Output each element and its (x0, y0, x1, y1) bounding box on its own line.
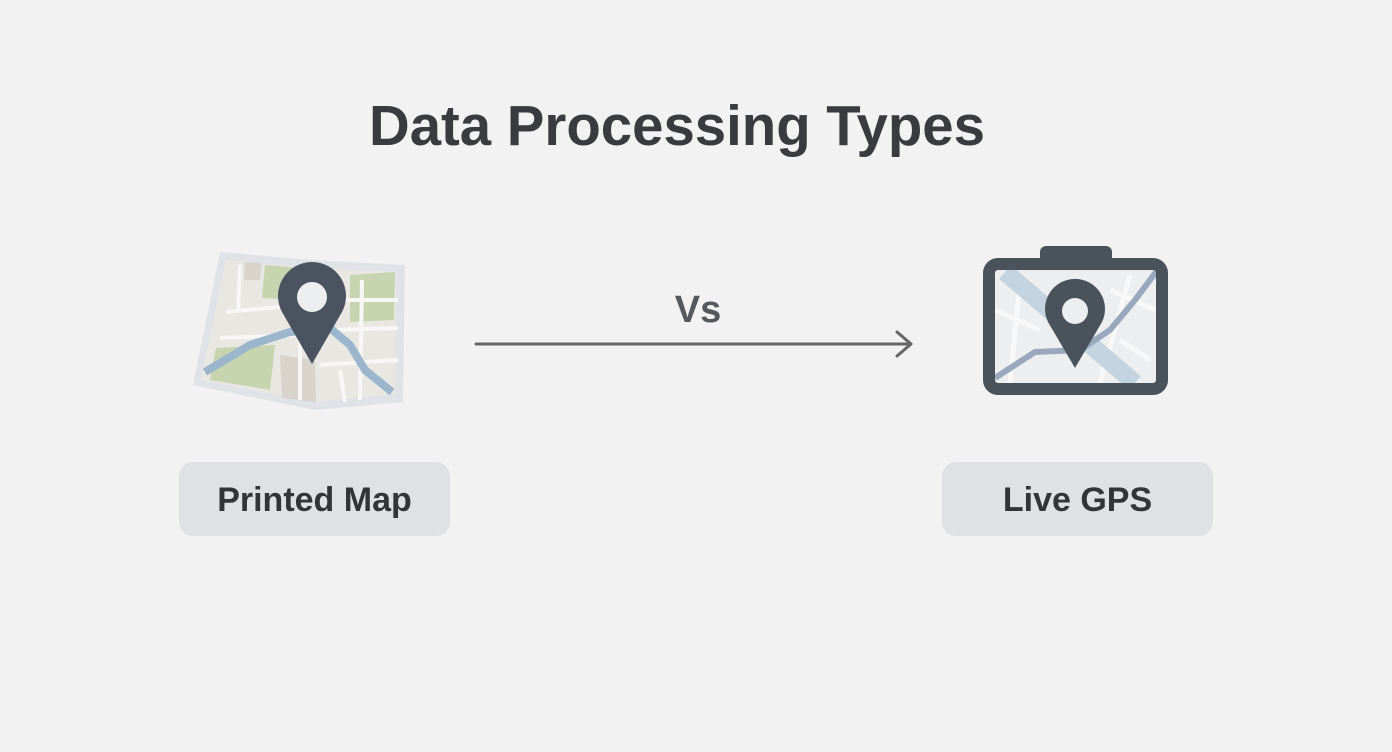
icon: map pin (278, 262, 346, 364)
vs label: Vs (675, 289, 721, 331)
icon: live GPS screen (989, 246, 1162, 389)
icon: gps pin (1045, 279, 1105, 368)
title: Data Processing Types (369, 94, 985, 158)
label: printed map (179, 462, 450, 536)
label: live gps: Live GPS (1003, 481, 1152, 519)
label: live gps (942, 462, 1213, 536)
icon: printed map (193, 252, 405, 410)
arrow (476, 332, 911, 356)
label: printed map: Printed Map (217, 481, 412, 519)
